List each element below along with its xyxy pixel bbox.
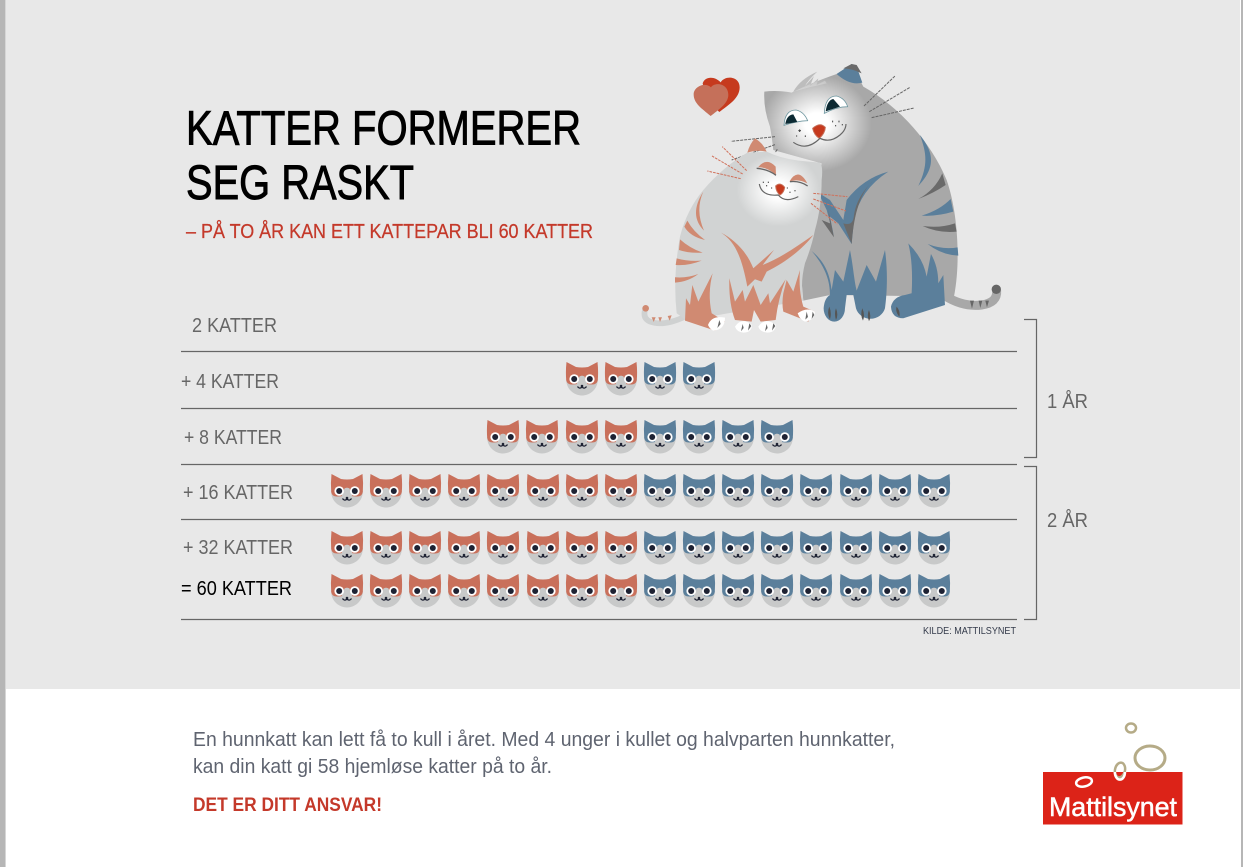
call to action: DET ER DITT ANSVAR!: [193, 795, 382, 816]
stripes: [675, 192, 813, 287]
bracket: 1 year: [1024, 320, 1036, 458]
illustration: two cats with hearts: [642, 64, 1001, 333]
eyes closed: [758, 162, 776, 175]
body text: En hunnkatt kan lett få to kull i året. Med 4 unger i kullet og halvparten hunnkatter,: [193, 729, 895, 751]
big grey cat: [731, 64, 1001, 322]
subtitle: – PÅ TO ÅR KAN ETT KATTEPAR BLI 60 KATTER: [186, 220, 593, 243]
legs: [685, 273, 725, 331]
row labels: = 60 KATTER: [181, 578, 292, 600]
row lines: [181, 352, 1017, 620]
row labels: 2 KATTER: [192, 315, 277, 337]
logo: Mattilsynet: Mattilsynet: [1049, 792, 1177, 822]
bracket: 2 years: [1024, 466, 1036, 620]
label: 2 years: 2 ÅR: [1047, 509, 1088, 532]
row labels: [181, 315, 293, 600]
body text: [193, 729, 895, 778]
row labels: + 4 KATTER: [181, 371, 279, 393]
row labels: + 8 KATTER: [184, 427, 282, 449]
row: +16 cats: [331, 474, 950, 508]
title: SEG RASKT: [186, 157, 414, 210]
title: KATTER FORMERER: [186, 102, 581, 156]
row: +4 cats: [566, 362, 715, 396]
whiskers: [731, 76, 914, 160]
logo: Mattilsynet: [1043, 724, 1182, 824]
eyes: [784, 110, 808, 125]
stripes: [918, 135, 958, 256]
source: KILDE: MATTILSYNET: [923, 626, 1016, 637]
small light cat: [642, 138, 847, 333]
label: 1 year: 1 ÅR: [1047, 390, 1088, 413]
body text: kan din katt gi 58 hjemløse katter på to år.: [193, 756, 552, 778]
legs: [812, 250, 887, 322]
chest: [818, 172, 888, 244]
row: +32 cats and =60 cats: [331, 531, 950, 608]
icon: hearts: [694, 78, 740, 116]
title: [186, 102, 581, 210]
whiskers: [707, 147, 847, 224]
row labels: + 16 KATTER: [183, 482, 293, 504]
row: +8 cats: [487, 420, 793, 454]
nose and mouth: [776, 184, 785, 195]
row labels: + 32 KATTER: [183, 537, 293, 559]
nose and mouth: [813, 125, 825, 138]
